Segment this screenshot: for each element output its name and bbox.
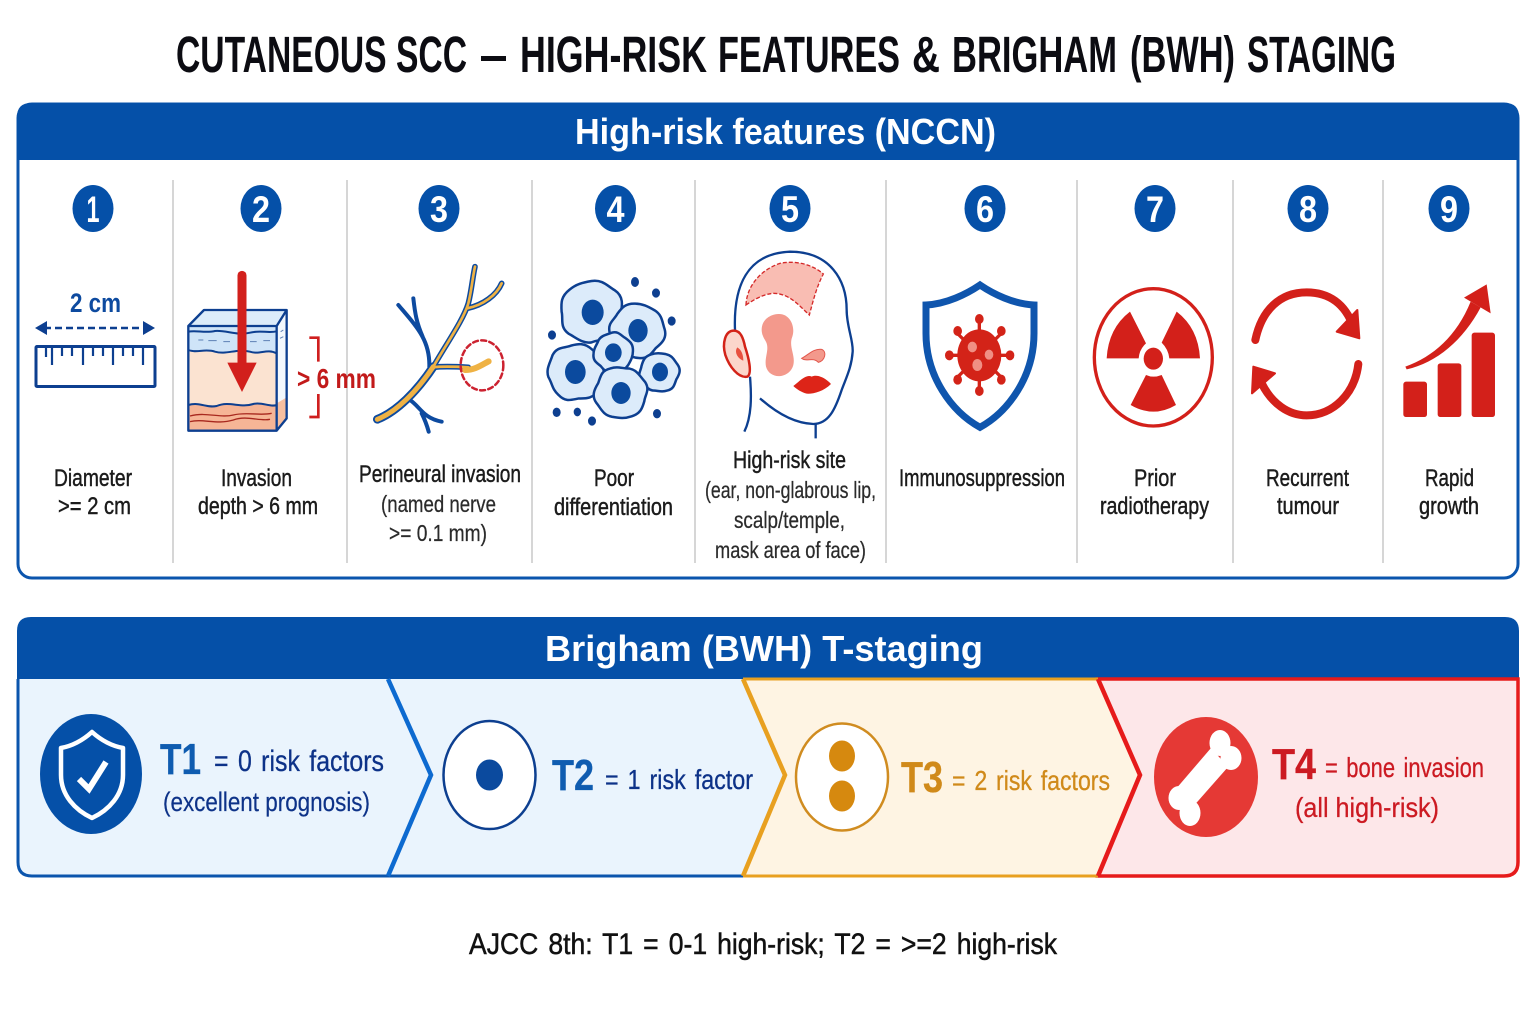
icon: shield with virus	[926, 285, 1034, 427]
label 2: Invasion	[221, 465, 292, 492]
feature 6: immunosuppression	[899, 185, 1065, 492]
icon: shield with check	[40, 714, 142, 834]
panel heading: Brigham (BWH) T-staging	[545, 628, 983, 669]
label 8	[1266, 465, 1349, 520]
stage T4	[1098, 679, 1518, 876]
icon: branching nerve	[377, 267, 503, 432]
icon: irregular cells	[543, 277, 684, 426]
label 8: Recurrent	[1266, 465, 1349, 492]
number badge 4: 4	[606, 189, 625, 230]
panel header bar	[17, 103, 1519, 160]
number badge 8	[1288, 185, 1328, 232]
icon: ruler with 2 cm arrow	[35, 288, 155, 386]
number badge 2: 2	[252, 189, 270, 230]
title: HIGH-RISK	[520, 26, 707, 83]
T4 text: T4	[1272, 740, 1316, 789]
T1 text: T1	[160, 735, 201, 784]
label 5: (ear, non-glabrous lip,	[705, 477, 876, 503]
icon: face with high-risk zones	[724, 252, 853, 438]
panel header bar	[17, 617, 1519, 680]
feature 4: poor differentiation	[543, 185, 684, 521]
T4 text: = bone invasion	[1325, 752, 1484, 783]
icon: skin block with depth arrow	[188, 275, 318, 431]
chevron T1	[18, 679, 431, 876]
T3 text	[901, 753, 1110, 802]
label 1	[54, 465, 132, 520]
footnote: AJCC 8th: AJCC 8th: T1 = 0-1 high-risk; T2 = >=2 high-risk	[469, 928, 1058, 961]
label 6: Immunosuppression	[899, 465, 1065, 492]
label 4	[554, 465, 673, 521]
label 3: Perineural invasion	[359, 461, 521, 488]
title: CUTANEOUS SCC	[176, 26, 467, 83]
label 7	[1100, 465, 1209, 520]
icon: growth bars and arrow	[1403, 284, 1495, 417]
T3 text: T3	[901, 753, 943, 802]
label 3: >= 0.1 mm)	[389, 520, 487, 546]
label 4: differentiation	[554, 494, 673, 521]
depth label: > 6 mm	[297, 363, 376, 394]
T2 text: T2	[552, 751, 594, 800]
number badge 4	[595, 185, 636, 232]
panel: high-risk features	[17, 103, 1519, 578]
number badge 1	[72, 185, 114, 232]
title: BRIGHAM	[952, 26, 1117, 83]
T1 text: (excellent prognosis)	[163, 787, 370, 817]
panel heading: High-risk features (NCCN)	[575, 111, 996, 152]
label 3: (named nerve	[381, 491, 496, 517]
icon: radiation symbol	[1094, 289, 1212, 426]
icon: one dot	[444, 721, 536, 829]
number badge 5	[770, 185, 810, 232]
number badge 2	[240, 185, 282, 232]
T4 text	[1272, 740, 1484, 823]
label 3	[359, 461, 521, 546]
label 4: Poor	[594, 465, 634, 492]
feature 1: diameter	[35, 185, 155, 520]
chevron T3	[743, 679, 1140, 876]
label 9: growth	[1419, 493, 1479, 520]
T2 text	[552, 751, 753, 800]
feature 2: invasion depth	[188, 185, 376, 520]
icon: ruler with 2 cm arrow: 2 cm	[70, 288, 121, 318]
label 1: Diameter	[54, 465, 132, 492]
number badge 1: 1	[86, 189, 100, 230]
T1 text	[160, 735, 384, 817]
T3 text: = 2 risk factors	[952, 765, 1110, 796]
number badge 9	[1428, 185, 1470, 232]
stage T1	[18, 679, 431, 876]
number badge 5: 5	[781, 189, 799, 230]
label 1: >= 2 cm	[58, 493, 131, 520]
number badge 6: 6	[976, 189, 994, 230]
panel: Brigham T-staging	[17, 617, 1519, 876]
number badge 9: 9	[1440, 189, 1458, 230]
label 5: High-risk site	[733, 447, 846, 474]
title: (BWH)	[1130, 26, 1235, 83]
label 9	[1419, 465, 1479, 520]
title: STAGING	[1247, 26, 1396, 83]
T2 text: = 1 risk factor	[605, 764, 753, 795]
title: FEATURES	[718, 26, 900, 83]
feature 3: perineural invasion	[359, 185, 521, 546]
T1 text: = 0 risk factors	[214, 745, 384, 778]
label 2: depth > 6 mm	[198, 493, 318, 520]
T4 text: (all high-risk)	[1295, 792, 1439, 823]
title	[176, 26, 1396, 83]
icon: two dots	[796, 724, 888, 830]
label 8: tumour	[1277, 493, 1339, 520]
chevron T4	[1098, 679, 1518, 876]
title: &	[912, 26, 940, 83]
title: —	[481, 26, 506, 83]
stage T3	[743, 679, 1140, 876]
label 5	[705, 447, 876, 563]
label 9: Rapid	[1425, 465, 1474, 492]
label 5: mask area of face)	[715, 537, 866, 563]
stage T2	[388, 679, 785, 876]
label 7: radiotherapy	[1100, 493, 1209, 520]
feature 8: recurrent tumour	[1252, 185, 1359, 520]
chevron T2	[388, 679, 785, 876]
icon: recurrence arrows	[1252, 292, 1359, 415]
number badge 3	[418, 185, 460, 232]
number badge 8: 8	[1299, 189, 1317, 230]
feature 7: prior radiotherapy	[1094, 185, 1212, 520]
number badge 6	[964, 185, 1006, 232]
number badge 3: 3	[430, 189, 448, 230]
feature 9: rapid growth	[1403, 185, 1495, 520]
icon: bone	[1154, 717, 1258, 837]
feature 5: high-risk site	[705, 185, 876, 563]
label 5: scalp/temple,	[734, 507, 845, 533]
number badge 7: 7	[1146, 189, 1164, 230]
label 7: Prior	[1134, 465, 1176, 492]
label 2	[198, 465, 318, 520]
number badge 7	[1134, 185, 1176, 232]
